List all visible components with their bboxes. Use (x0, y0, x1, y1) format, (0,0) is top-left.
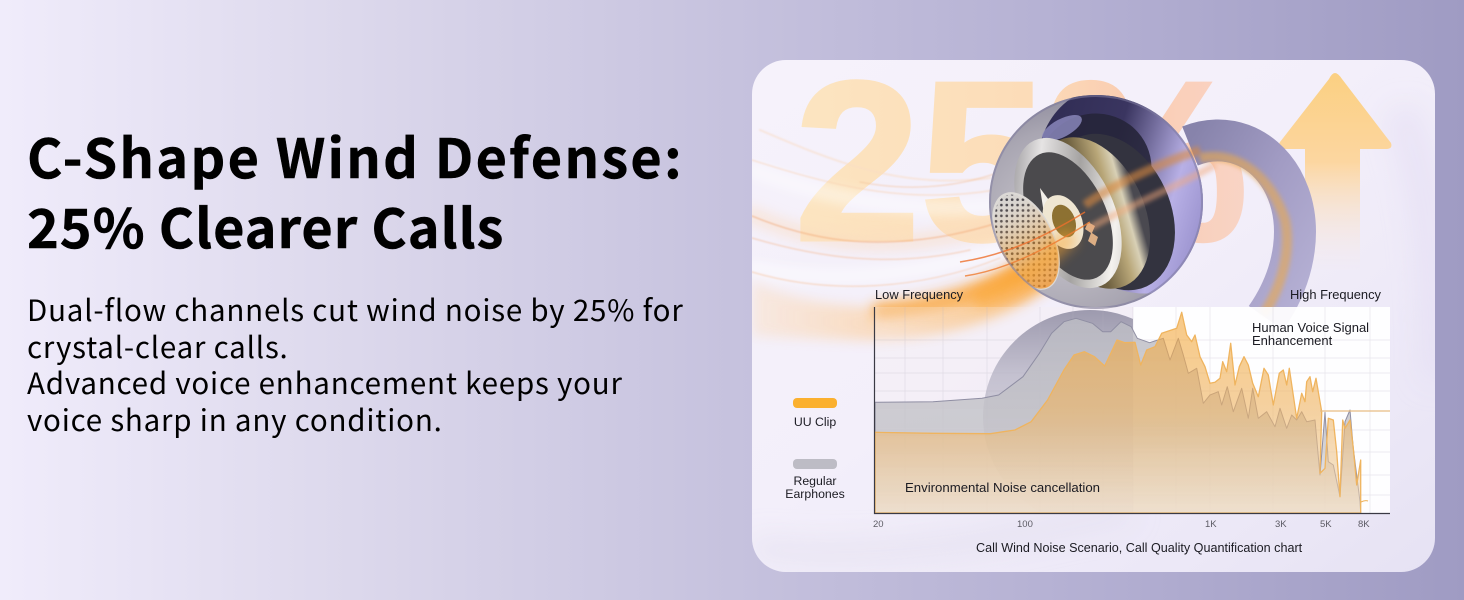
x-axis ticks: 8K (1358, 519, 1370, 530)
legend: UU Clip (793, 398, 837, 429)
centre ring (1042, 195, 1084, 249)
chart (873, 287, 1390, 555)
voice enhancement label: Human Voice Signal (1252, 320, 1369, 335)
frequency labels: High Frequency (1290, 287, 1382, 302)
grey regular earphones curve (875, 318, 1361, 513)
big 25% figure: 25% (794, 35, 1247, 289)
wind flow streaks (752, 130, 1070, 340)
voice enhancement label (1253, 322, 1368, 345)
copper contacts (1085, 222, 1098, 246)
panel: earbud and chart card (752, 35, 1438, 572)
title: C-Shape Wind Defense: (27, 115, 684, 194)
grid (875, 307, 1390, 513)
dark dome (1042, 95, 1203, 294)
mesh grille (992, 192, 1060, 290)
x-axis ticks (874, 520, 1370, 527)
notch highlight (1040, 188, 1048, 209)
x-axis ticks: 100 (1017, 519, 1033, 530)
soft lavender sweeps (752, 110, 1438, 552)
chart caption: Call Wind Noise Scenario, Call Quality Quantification chart (976, 541, 1303, 555)
silver ring (1014, 138, 1122, 288)
axes (874, 307, 1390, 514)
big up arrow (1279, 73, 1392, 248)
inner cavity (1057, 114, 1152, 166)
x-axis ticks: 5K (1320, 519, 1332, 530)
ear hook (1190, 140, 1295, 318)
driver cylinder (1078, 134, 1175, 290)
frequency labels (876, 290, 1381, 302)
legend: Regular Earphones: Earphones (785, 487, 845, 501)
noise cancellation label: Environmental Noise cancellation (905, 480, 1100, 495)
earbud (960, 95, 1217, 311)
x-axis ticks: 1K (1205, 519, 1217, 530)
frequency labels: Low Frequency (875, 287, 964, 302)
x-axis ticks: 20 (873, 519, 884, 530)
orange flow over earbud (975, 235, 1072, 300)
voice enhancement label: Enhancement (1252, 333, 1333, 348)
body text: Dual-flow channels cut wind noise by 25% for (27, 288, 684, 330)
body text (27, 288, 684, 440)
body text: Advanced voice enhancement keeps your (27, 361, 623, 403)
body text: crystal-clear calls. (27, 325, 289, 367)
legend: UU Clip: UU Clip (794, 415, 836, 429)
body text: voice sharp in any condition. (27, 398, 443, 440)
x-axis ticks: 3K (1275, 519, 1287, 530)
product panel graphic (752, 60, 1435, 572)
legend: Regular Earphones (785, 459, 845, 501)
reference line (1320, 410, 1390, 412)
chart background (1133, 307, 1390, 513)
orange UU Clip curve (875, 312, 1361, 513)
legend: Regular Earphones: Regular (793, 474, 837, 488)
curves (875, 312, 1361, 513)
title: 25% Clearer Calls (27, 185, 504, 264)
reflected earbud (984, 310, 1133, 400)
title (27, 115, 684, 264)
